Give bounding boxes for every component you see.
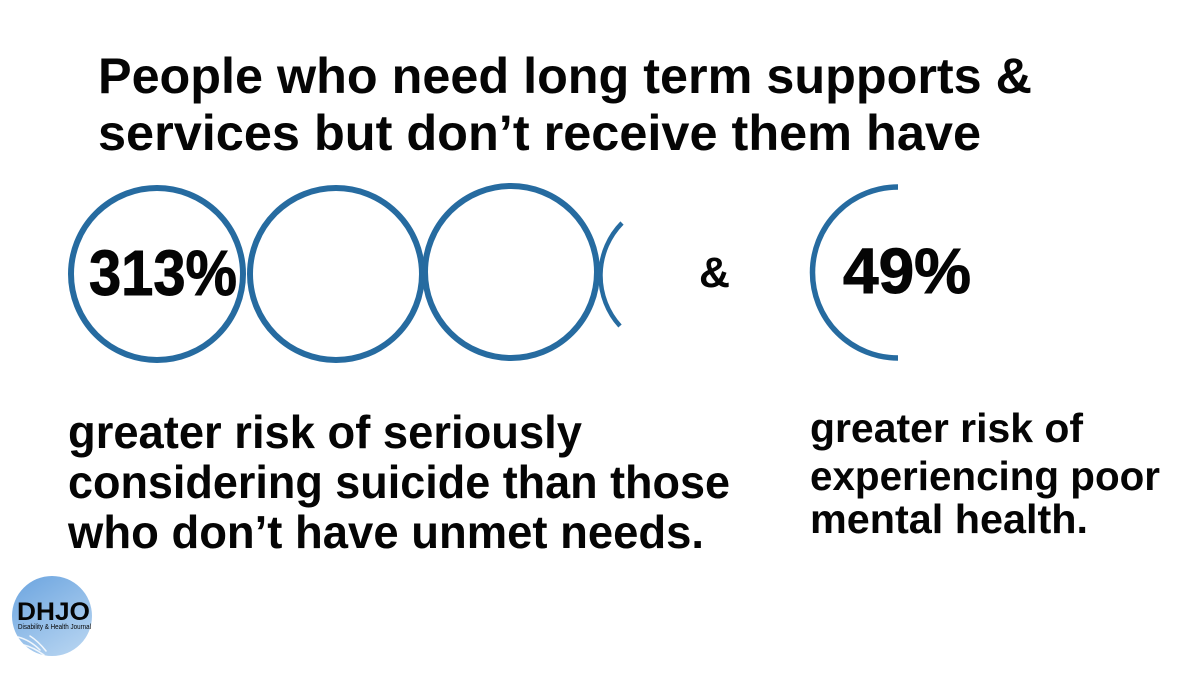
title: services but don’t receive them have — [98, 105, 981, 161]
ampersand: & — [699, 249, 730, 297]
logo: DHJO — [12, 576, 92, 656]
logo wordmark: DHJO — [17, 598, 90, 626]
chart: half circle showing 49% — [810, 184, 898, 361]
logo brush strokes — [18, 636, 46, 655]
text block: mental health description: experiencing poor — [810, 453, 1160, 499]
logo circle — [12, 576, 92, 656]
circle 2 of 313% — [250, 188, 422, 360]
text block: mental health description — [810, 405, 1160, 542]
statistic: 49%: 49% — [843, 235, 971, 307]
title — [98, 48, 1032, 161]
circle 1 of 313% — [71, 188, 243, 360]
logo subtitle: Disability & Health Journal — [18, 624, 91, 631]
partial circle of 313% — [601, 223, 622, 326]
text block: mental health description: mental health. — [810, 496, 1088, 542]
text block: suicide risk description: considering suicide than those — [68, 456, 730, 508]
statistic: 313%: 313% — [89, 237, 237, 309]
text block: suicide risk description — [67, 406, 730, 558]
title: People who need long term supports & — [98, 48, 1032, 104]
text block: suicide risk description: greater risk of seriously — [68, 406, 582, 458]
chart: circles showing 313% greater risk — [71, 186, 622, 360]
text block: mental health description: greater risk of — [810, 405, 1083, 451]
circle 3 of 313% — [425, 186, 597, 358]
text block: suicide risk description: who don’t have unmet needs. — [67, 506, 704, 558]
